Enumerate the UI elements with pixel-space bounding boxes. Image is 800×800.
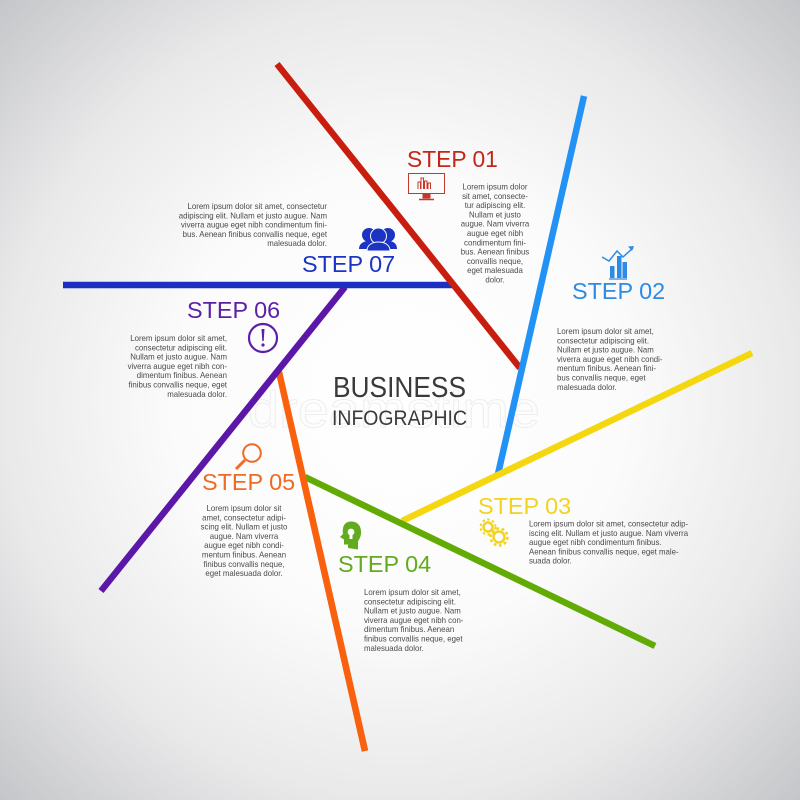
heading: step 05: STEP 05 xyxy=(202,469,295,495)
text: step 02: Lorem ipsum dolor sit amet, xyxy=(557,327,654,336)
text: step 02: bus convallis neque, eget xyxy=(557,374,646,382)
text: step 07: adipiscing elit. Nullam et justo augue. Nam xyxy=(179,211,327,220)
text: step 07: Lorem ipsum dolor sit amet, consectetur xyxy=(187,202,327,211)
text: step 01: sit amet, consecte- xyxy=(462,192,528,201)
icon: head with light bulb xyxy=(340,522,361,550)
text: step 01: dolor. xyxy=(485,276,505,284)
text: step 02: consectetur adipiscing elit. xyxy=(557,336,649,345)
text: step 06: viverra augue eget nibh con- xyxy=(128,362,227,371)
text: step 01 xyxy=(461,182,530,284)
text: step 07: bus. Aenean finibus convallis neque, eget xyxy=(183,230,328,239)
heading: step 02: STEP 02 xyxy=(572,278,665,304)
text: step 01: bus. Aenean finibus xyxy=(461,248,529,257)
text: step 04: consectetur adipiscing elit. xyxy=(364,597,456,606)
panel: step 06 xyxy=(128,297,280,399)
text: step 05: Lorem ipsum dolor sit xyxy=(207,504,282,513)
text: step 02: mentum finibus. Aenean fini- xyxy=(557,364,656,373)
text: step 01: Lorem ipsum dolor xyxy=(463,182,528,192)
text: step 07: viverra augue eget nibh condimentum fini- xyxy=(181,221,327,230)
text: step 03: Aenean finibus convallis neque, eget male- xyxy=(529,547,679,556)
text: step 01: tur adipiscing elit. xyxy=(465,201,525,210)
text: step 06 xyxy=(128,334,228,399)
panel: step 07 xyxy=(179,202,397,277)
icon: monitor with chart xyxy=(408,174,444,200)
text: step 04: Lorem ipsum dolor sit amet, xyxy=(364,588,461,597)
panel: step 01 xyxy=(407,146,530,284)
panel: step 02 xyxy=(557,246,665,392)
text: step 03: suada dolor. xyxy=(529,557,572,566)
text: step 05: mentum finibus. Aenean xyxy=(202,550,286,560)
heading: step 03: STEP 03 xyxy=(478,493,571,519)
line: step 01 red xyxy=(277,64,520,368)
text: step 04: malesuada dolor. xyxy=(364,644,424,653)
text: step 04: viverra augue eget nibh con- xyxy=(364,616,464,625)
text: step 05: amet, consectetur adipi- xyxy=(202,513,286,522)
text: step 01: augue. Nam viverra xyxy=(461,220,530,229)
panel: step 05 xyxy=(201,444,295,578)
text: step 06: consectetur adipiscing elit. xyxy=(135,343,227,352)
text: step 02 xyxy=(557,327,663,392)
line: step 05 orange, lower overlap xyxy=(295,442,365,751)
text: step 01: Nullam et justo xyxy=(469,210,522,219)
text: step 02: viverra augue eget nibh condi- xyxy=(557,355,663,364)
icon: exclamation circle xyxy=(249,324,277,352)
text: step 05: eget malesuada dolor. xyxy=(205,569,283,578)
heading: step 06: STEP 06 xyxy=(187,297,280,323)
text: step 04: finibus convallis neque, eget xyxy=(364,634,463,644)
text: step 01: condimentum fini- xyxy=(464,238,526,247)
text: step 01: eget malesuada xyxy=(467,266,524,275)
text: step 04: dimentum finibus. Aenean xyxy=(364,625,454,634)
heading: step 07: STEP 07 xyxy=(302,251,395,277)
text: step 05: augue. Nam viverra xyxy=(210,532,279,541)
text: step 03: augue eget nibh condimentum finibus. xyxy=(529,538,662,547)
text: step 05: finibus convallis neque, xyxy=(203,560,285,569)
icon: rising bar chart xyxy=(602,246,634,279)
text: step 04 xyxy=(364,588,464,653)
title xyxy=(332,372,467,430)
text: step 06: finibus convallis neque, eget xyxy=(128,380,228,390)
text: step 01: convallis neque, xyxy=(467,257,523,266)
text: step 03: Lorem ipsum dolor sit amet, consectetur adip- xyxy=(529,520,689,528)
line: step 03 yellow xyxy=(402,353,752,521)
title: INFOGRAPHIC xyxy=(332,407,467,430)
text: step 02: malesuada dolor. xyxy=(557,383,617,392)
line: step 07 navy xyxy=(63,282,453,288)
text: step 03 xyxy=(529,520,689,566)
text: step 06: Nullam et justo augue. Nam xyxy=(130,353,227,362)
icon: magnifying glass xyxy=(236,444,261,469)
icon: gears xyxy=(480,520,508,546)
title: BUSINESS xyxy=(333,372,466,404)
text: step 06: Lorem ipsum dolor sit amet, xyxy=(130,334,227,343)
line: step 04 green xyxy=(305,477,655,646)
icon: group of people xyxy=(359,228,397,251)
text: step 07: malesuada dolor. xyxy=(267,239,327,248)
panel: step 03 xyxy=(478,493,689,566)
text: step 05 xyxy=(201,504,288,578)
text: step 05: scing elit. Nullam et justo xyxy=(201,523,288,532)
text: step 02: Nullam et justo augue. Nam xyxy=(557,346,654,355)
text: step 06: dimentum finibus. Aenean xyxy=(137,371,227,380)
heading: step 01: STEP 01 xyxy=(407,146,498,172)
watermark: dreamstime xyxy=(248,381,540,438)
text: step 04: Nullam et justo augue. Nam xyxy=(364,607,461,616)
text: step 06: malesuada dolor. xyxy=(167,390,227,399)
line: step 06 purple xyxy=(101,287,345,591)
heading: step 04: STEP 04 xyxy=(338,551,431,577)
text: step 07 xyxy=(179,202,328,248)
text: step 03: iscing elit. Nullam et justo augue. Nam viverra xyxy=(529,529,689,538)
line: step 05 orange xyxy=(279,372,365,751)
text: step 05: augue eget nibh condi- xyxy=(204,541,284,550)
line: step 02 blue xyxy=(498,96,584,474)
text: step 01: augue eget nibh xyxy=(467,229,523,238)
panel: step 04 xyxy=(338,522,464,653)
